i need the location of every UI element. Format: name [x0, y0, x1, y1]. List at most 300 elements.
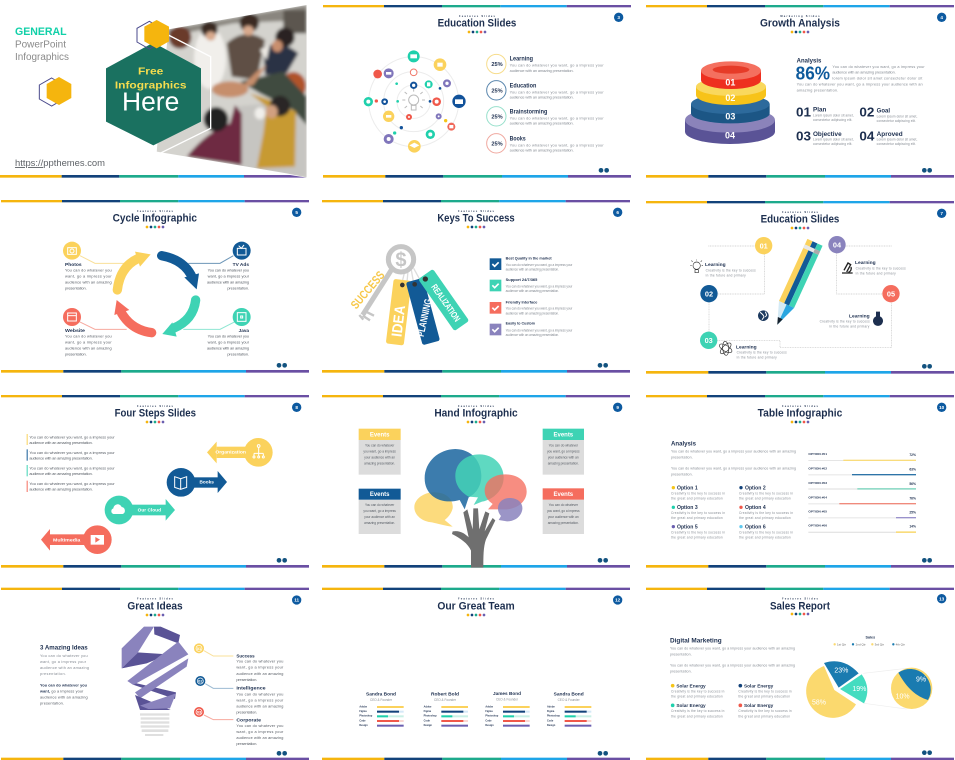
event card red: you want, go a impress: [547, 509, 580, 513]
item solar energy teal: [671, 703, 725, 718]
green hexagon panel: Free Infographics Here: [106, 43, 201, 145]
cover subtitle: Infographics: Infographics: [15, 52, 69, 63]
page badge: 13: [939, 596, 945, 601]
eyebrow: Features Slides: [782, 597, 819, 601]
hexagon line: Here: Here: [122, 87, 179, 117]
block: flask learning: Creativity is the key to success: [820, 320, 870, 324]
arrow step: Organization: [207, 438, 273, 467]
analysis paragraphs: You can do whatever you want, go a impress your audience with an amazing: [671, 467, 796, 471]
event card yellow: you want, go a impress: [363, 449, 396, 453]
cover subtitle: PowerPoint: PowerPoint: [15, 40, 66, 51]
layer 03: 03: [725, 111, 735, 121]
item: TV Ads: [207, 242, 251, 290]
speech bubbles cluster: [414, 449, 527, 527]
team member: James Bond: Design: [485, 724, 494, 727]
event card navy: You can do whatever: [365, 503, 394, 507]
team member: Robert Bold: CEO & Founder: [434, 698, 456, 702]
page badge: [292, 595, 301, 605]
left paragraph dark: audience with an amazing: [40, 695, 88, 699]
step badge 05: [882, 285, 900, 302]
left paragraph dark: You can do whatever you: [40, 684, 88, 688]
bar option 06: 14%: [909, 525, 916, 529]
callout 01 Success: 01: [197, 646, 202, 651]
note 3: audience with an amazing presentation.: [29, 472, 93, 476]
slide 6: Education Slides pencil: [646, 201, 954, 374]
footer icons: [277, 363, 287, 368]
item solar energy teal: Solar Energy: [676, 703, 706, 709]
slice 23%: 23%: [834, 667, 848, 674]
checklist item: Friendly Interface: Friendly Interface: [506, 300, 537, 304]
team member: Sandra Bond: [359, 692, 404, 727]
layer 04: 04: [725, 130, 735, 140]
event card yellow: your audience with an: [364, 455, 395, 459]
bar option 04: 76%: [909, 496, 916, 500]
slide 3: Growth Analysis: [646, 5, 954, 178]
event card red: amazing presentation.: [548, 521, 579, 525]
team member: Sandra Bond 2: Sandra Bond: [554, 692, 584, 697]
event card navy: amazing presentation.: [364, 521, 395, 525]
list item: Brainstorming: You can do whatever you want, go a impress your: [510, 116, 604, 120]
eyebrow: Features Slides: [782, 404, 819, 408]
bottom colour bars: [0, 175, 307, 178]
step badge 05: 05: [887, 289, 895, 298]
item: Photos: presentation.: [65, 286, 87, 290]
list item: Learning: Learning: [510, 57, 533, 63]
note 4: [27, 481, 115, 492]
title: Four Steps Slides: [115, 408, 196, 420]
team member: Robert Bold: [424, 692, 468, 727]
page badge: 9: [616, 405, 619, 410]
item: Java: Java: [239, 328, 249, 333]
left paragraph gray: [40, 654, 89, 676]
page badge: 5: [295, 210, 298, 215]
list item: Education: Education: [510, 83, 537, 89]
tag: IDEA: IDEA: [389, 304, 409, 338]
paragraphs: presentation.: [670, 670, 692, 674]
event card teal: you want, go a impress: [547, 449, 580, 453]
block: microscope learning: Creativity is the key to success: [856, 266, 906, 270]
bar option 01: [808, 452, 916, 461]
note 1: You can do whatever you want, go a impress your: [29, 435, 115, 439]
item 01 Plan: 01: [796, 105, 812, 120]
list item: Books: Books: [510, 136, 526, 142]
checklist item: Easily to Custom: [490, 322, 572, 337]
bar option 02: [808, 466, 916, 475]
icon: globe: [758, 310, 769, 321]
eyebrow: Features Slides: [458, 209, 495, 213]
step badge 02: [700, 285, 718, 302]
option 4: the great and primary education: [739, 516, 791, 520]
checklist item: Best Quality: audience with an amazing presentation.: [506, 268, 559, 272]
page badge: [613, 208, 622, 217]
item 03 Objective: 03: [796, 129, 811, 144]
team member: Sandra Bond: Adobe: [359, 705, 368, 708]
item: Photos: You can do whatever you: [65, 268, 112, 272]
arrow step: Books: Books: [199, 479, 214, 484]
bar option 04: OPTION #04: [808, 495, 828, 499]
slide 5: Keys To Success: [322, 200, 630, 373]
page badge: [613, 595, 622, 605]
title: Great Ideas: [127, 601, 183, 613]
item 01 Plan: [796, 105, 854, 122]
item solar energy teal: the great and primary education: [671, 714, 723, 718]
callout 01 Success: [194, 643, 284, 682]
slide 2: Education Slides: [323, 5, 631, 178]
item 02 Goal: Lorem ipsum dolor sit amet,: [877, 115, 917, 119]
bar option 04: [808, 495, 916, 504]
option 4: Creativity is the key to success in: [739, 511, 793, 515]
option 1: the great and primary education: [671, 496, 723, 500]
item: Java: want, go a impress your: [208, 340, 250, 344]
callout 01 Success: You can do whatever you: [236, 660, 283, 664]
title: Our Great Team: [437, 601, 515, 613]
team member: Sandra Bond: Photoshop: [359, 715, 373, 718]
analysis paragraphs: presentation.: [671, 473, 693, 477]
bar option 05: OPTION #05: [808, 509, 828, 513]
checklist item: Best Quality: [490, 257, 572, 272]
team member: Robert Bold: Figma: [424, 710, 432, 713]
item solar energy teal: Creativity is the key to success in: [671, 709, 725, 713]
block: bulb learning: in the future and primary: [706, 273, 746, 277]
team member: Robert Bold: Code: [424, 719, 430, 722]
page badge: [937, 594, 946, 603]
analysis paragraph: audience with an amazing presentation.: [832, 71, 896, 75]
circular icon diagram: [364, 50, 466, 153]
eyebrow: Features Slides: [137, 209, 174, 213]
item 03 Objective: consectetur adipiscing elit.: [813, 142, 852, 146]
heading: Digital Marketing: Digital Marketing: [670, 637, 722, 644]
footer icons: [922, 558, 932, 563]
option 6: Option 6: [745, 524, 766, 530]
option 1: Option 1: [677, 485, 698, 491]
event card yellow: Events: [370, 432, 390, 438]
callout 03 Corporate: presentation.: [236, 742, 257, 746]
bar option 01: 72%: [909, 453, 916, 457]
icon: yellow hexagon accent: [137, 20, 169, 49]
block: atom learning: Creativity is the key to success: [737, 351, 787, 355]
slide 10: Great Ideas: [1, 588, 309, 760]
item: Website: You can do whatever you: [65, 334, 112, 338]
step badge 03: [700, 332, 717, 349]
left paragraph dark: want, go a impress your: [39, 690, 84, 694]
footer icons: [599, 168, 609, 173]
block: flask learning: [820, 312, 883, 329]
event card navy: [359, 489, 401, 534]
title: Education Slides: [438, 18, 516, 30]
team member: Sandra Bond 2: Figma: [547, 710, 555, 713]
block: bulb learning: Learning: [705, 262, 726, 267]
team member: Robert Bold: Design: [424, 724, 432, 727]
icon: light bulb: [402, 89, 425, 110]
item solar energy yellow: the great and primary education: [671, 695, 723, 699]
arrow: yellow: [117, 252, 151, 290]
event card teal: your audience with an: [548, 455, 579, 459]
page badge: 3: [617, 15, 620, 20]
team member: James Bond: Code: [485, 719, 492, 722]
bar option 02: OPTION #02: [808, 466, 828, 470]
title: Education Slides: [761, 214, 839, 226]
list item: Learning: You can do whatever you want, go a impress your: [510, 64, 604, 68]
analysis paragraphs: presentation.: [671, 455, 693, 459]
list item: Brainstorming: audience with an amazing presentation.: [510, 122, 574, 126]
pencil illustration: [770, 239, 823, 328]
callout 02 Intelligence: presentation.: [236, 710, 257, 714]
team member: Sandra Bond 2: [547, 692, 591, 727]
callout 02 Intelligence: [195, 676, 284, 714]
analysis paragraphs: You can do whatever you want, go a impress your audience with an amazing: [671, 450, 796, 454]
item: TV Ads: want, go a impress your: [208, 274, 250, 278]
item: Java: [207, 308, 251, 356]
eyebrow: Features Slides: [782, 210, 819, 214]
arrow step: Books: [167, 468, 227, 497]
page badge: 12: [615, 598, 621, 603]
pie of pie chart: [806, 661, 932, 718]
team member: Sandra Bond: CEO & Founder: [370, 698, 392, 702]
slide 8: Hand Infographic: [322, 395, 630, 568]
item 01 Plan: Lorem ipsum dolor sit amet,: [813, 114, 854, 118]
bar option 05: [808, 509, 916, 518]
callout 03 Corporate: audience with an amazing: [236, 736, 283, 740]
callout 01 Success: audience with an amazing: [236, 672, 283, 676]
item: Website: Website: [65, 328, 85, 333]
stacked cylinder chart: [685, 61, 775, 144]
note 4: audience with an amazing presentation.: [29, 488, 93, 492]
option 2: Creativity is the key to success in: [739, 491, 793, 495]
note 1: [27, 434, 115, 445]
callout 02 Intelligence: You can do whatever you: [236, 692, 283, 696]
hexagon outline: [160, 35, 211, 153]
big stat 86%: 86%: [796, 62, 830, 83]
website link: https://ppthemes.com: [15, 158, 105, 168]
item solar energy red: the great and primary education: [738, 714, 790, 718]
item: Java: You can do whatever you: [208, 334, 249, 338]
list item: Books: audience with an amazing presentation.: [510, 149, 574, 153]
bar option 03: OPTION #03: [808, 481, 828, 485]
item: Photos: Photos: [65, 262, 82, 267]
arrow step: Multimedia: [41, 525, 112, 554]
arrow step: Our Cloud: Our Cloud: [138, 507, 161, 512]
left paragraph gray: audience with an amazing: [40, 666, 89, 670]
checklist item: Easily to Custom: Easily to Custom: [506, 322, 535, 326]
list item: Books: 25%: [491, 141, 503, 147]
secondary pie: [891, 668, 932, 709]
option 4: Option 4: [745, 505, 766, 511]
callout 03 Corporate: 03: [197, 710, 202, 715]
title: Hand Infographic: [434, 408, 518, 420]
event card yellow: You can do whatever: [365, 443, 394, 447]
list item: Education: 25%: [491, 88, 503, 94]
eyebrow: Marketing Slides: [780, 14, 820, 18]
bar option 03: 56%: [909, 482, 916, 486]
left paragraph dark: [39, 684, 88, 705]
block: microscope learning: Learning: [855, 260, 876, 265]
eyebrow: Features Slides: [458, 404, 495, 408]
option 6: [739, 524, 793, 539]
cover title: GENERAL: GENERAL: [15, 26, 67, 38]
item 02 Goal: [859, 105, 917, 123]
callout 03 Corporate: [194, 707, 284, 746]
footer icons: [277, 558, 287, 563]
note 2: audience with an amazing presentation.: [29, 457, 93, 461]
option 1: Creativity is the key to success in: [671, 491, 725, 495]
callout 02 Intelligence: Intelligence: [236, 686, 266, 691]
key label: SUCCESS: SUCCESS: [348, 268, 387, 312]
layer 01: 01: [725, 78, 735, 88]
hexagon line: Free: Free: [138, 67, 164, 78]
arrow: blue: [162, 256, 199, 289]
option 3: [671, 505, 725, 520]
callout 02 Intelligence: 02: [198, 679, 203, 684]
bar option 03: [808, 481, 916, 490]
event card red: [543, 488, 584, 534]
key body: $: [395, 250, 407, 272]
page badge: 6: [616, 210, 619, 215]
list item: Brainstorming: 25%: [491, 114, 503, 120]
item: Java: presentation.: [227, 352, 249, 356]
list item: Education: audience with an amazing presentation.: [510, 96, 574, 100]
footer icons: [922, 168, 932, 173]
pie legend: 2nd Qtr: [856, 643, 866, 647]
option 5: [671, 524, 725, 539]
item solar energy navy: Solar Energy: [744, 683, 774, 689]
item: Website: presentation.: [65, 352, 87, 356]
left paragraph dark: presentation.: [40, 701, 64, 705]
item 04 Aproved: Aproved: [877, 132, 903, 138]
item solar energy red: Creativity is the key to success in: [738, 709, 792, 713]
bar option 02: 63%: [909, 467, 916, 471]
callout 03 Corporate: want, go a impress your: [236, 730, 284, 734]
arrow: teal: [162, 300, 196, 337]
footer icons: [598, 363, 608, 368]
page badge: [937, 209, 946, 218]
event card teal: [543, 429, 584, 475]
arrow: red: [114, 300, 152, 333]
event card red: your audience with an: [548, 515, 579, 519]
item solar energy navy: Creativity is the key to success in: [738, 689, 792, 693]
option 5: the great and primary education: [671, 535, 723, 539]
paragraphs: You can do whatever you want, go a impress your audience with an amazing: [670, 647, 795, 651]
team member: Sandra Bond 2: Adobe: [547, 705, 555, 708]
list item: Education: You can do whatever you want, go a impress your: [510, 90, 604, 94]
list item: Books: [487, 134, 604, 153]
bar option 06: OPTION #06: [808, 524, 828, 528]
left paragraph gray: You can do whatever you: [40, 654, 88, 658]
list item: Learning: 25%: [491, 62, 503, 68]
note 1: audience with an amazing presentation.: [29, 441, 93, 445]
page badge: 10: [939, 405, 945, 410]
checklist item: Best Quality: You can do whatever you want, go a impress your: [506, 263, 572, 267]
event card red: Events: [554, 492, 574, 498]
paragraphs: [670, 647, 795, 674]
option 1: [671, 485, 725, 500]
team member: Robert Bold: Photoshop: [424, 715, 437, 718]
title: Cycle Infographic: [113, 213, 197, 225]
item solar energy red: Solar Energy: [744, 703, 774, 709]
block: bulb learning: [690, 260, 756, 277]
event card navy: Events: [370, 492, 390, 498]
option 3: the great and primary education: [671, 516, 723, 520]
page badge: [937, 403, 946, 412]
item 02 Goal: 02: [859, 105, 874, 120]
checklist item: Friendly Interface: [490, 300, 572, 315]
callout 01 Success: Success: [236, 653, 255, 658]
step badge 04: 04: [833, 240, 842, 249]
key illustration: [348, 247, 469, 346]
analysis paragraph: amazing presentation.: [797, 88, 838, 92]
block: atom learning: [718, 341, 787, 360]
item: Photos: [63, 242, 112, 290]
option 2: the great and primary education: [739, 496, 791, 500]
note 4: You can do whatever you want, go a impress your: [29, 482, 115, 486]
chart title: Sales: Sales: [866, 636, 875, 640]
item: Website: audience with an amazing: [65, 346, 112, 350]
team member: Sandra Bond 2: Code: [547, 719, 554, 722]
item 03 Objective: Lorem ipsum dolor sit amet,: [813, 138, 854, 142]
eyebrow: Features Slides: [459, 14, 496, 18]
pie legend: 4th Qtr: [896, 643, 905, 647]
secondary pie: 9%: [916, 677, 926, 684]
item 02 Goal: consectetur adipiscing elit.: [877, 119, 916, 123]
arrow step: Multimedia: Multimedia: [53, 537, 81, 542]
hand silhouette: [452, 508, 495, 568]
list item: Education: [487, 81, 604, 100]
option 2: Option 2: [745, 485, 766, 491]
callout 01 Success: want, go a impress your: [236, 666, 284, 670]
item 04 Aproved: 04: [859, 129, 875, 144]
option 4: [739, 505, 793, 520]
callout 02 Intelligence: want, go a impress your: [236, 698, 284, 702]
progress bars: [808, 452, 916, 533]
slice 19%: 19%: [852, 686, 866, 693]
item: Photos: want, go a impress your: [65, 274, 112, 278]
team member: Sandra Bond 2: Design: [547, 724, 556, 727]
paragraphs: You can do whatever you want, go a impress your audience with an amazing: [670, 664, 795, 668]
step badge 04: [828, 236, 846, 253]
title: Sales Report: [770, 600, 830, 612]
eyebrow: Features Slides: [137, 597, 174, 601]
item solar energy red: [738, 703, 792, 718]
team member: Sandra Bond: Sandra Bond: [366, 692, 396, 697]
list item: Brainstorming: Brainstorming: [510, 109, 548, 115]
footer icons: [598, 558, 608, 563]
page badge: 8: [295, 405, 298, 410]
step badge 02: 02: [705, 289, 713, 298]
slice 58%: 58%: [812, 699, 826, 706]
item 03 Objective: Objective: [813, 132, 842, 138]
slide 11: Our Great Team: [322, 588, 630, 760]
page badge: 11: [294, 598, 300, 603]
option 6: the great and primary education: [739, 535, 791, 539]
event card yellow: amazing presentation.: [364, 461, 395, 465]
item solar energy navy: the great and primary education: [738, 695, 790, 699]
block: microscope learning: in the future and primary: [856, 271, 896, 275]
item: Website: want, go a impress your: [65, 340, 112, 344]
tag: REALIZATION: REALIZATION: [429, 282, 462, 323]
event card teal: amazing presentation.: [548, 461, 579, 465]
block: microscope learning: [842, 260, 906, 275]
checklist item: Friendly Interface: audience with an amazing presentation.: [506, 311, 559, 315]
item: TV Ads: presentation.: [227, 286, 249, 290]
analysis paragraph: You can do whatever you want, go a impress your audience with an: [797, 83, 923, 87]
checklist item: Easily to Custom: You can do whatever you want, go a impress your: [506, 328, 572, 332]
page badge: [292, 208, 301, 217]
arrow step: Our Cloud: [105, 496, 175, 524]
left paragraph gray: want, go a impress your: [40, 660, 87, 664]
team member: Sandra Bond: Design: [359, 724, 368, 727]
item: TV Ads: You can do whatever you: [208, 268, 249, 272]
ribbon light bulb: [122, 627, 188, 736]
item 02 Goal: Goal: [877, 109, 890, 115]
